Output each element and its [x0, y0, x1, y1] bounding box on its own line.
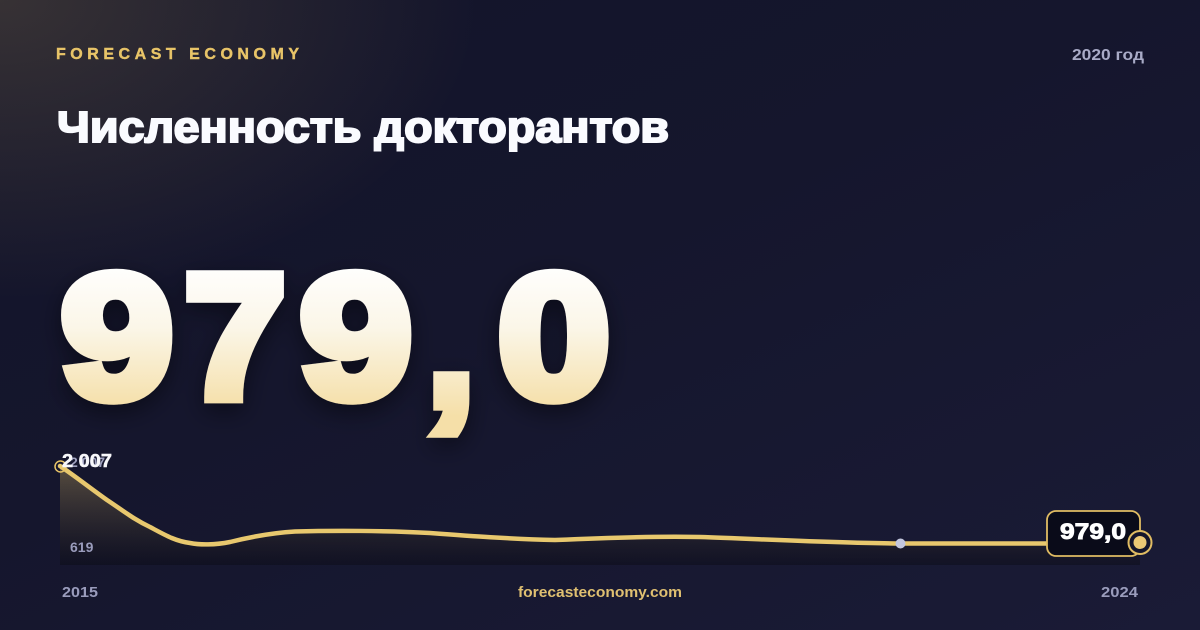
max value: 2 007 [62, 451, 112, 471]
2020 point marker [896, 538, 906, 548]
chart line [60, 466, 1140, 544]
big value: 9 [61, 238, 173, 434]
end marker [1128, 531, 1152, 554]
end year: 2024 [1101, 584, 1139, 601]
big value: 7 [185, 238, 285, 434]
value badge: 979,0 [1060, 519, 1126, 544]
brand label: FORECAST ECONOMY [56, 46, 299, 63]
title: Численность докторантов [57, 103, 669, 152]
min value: 619 [70, 539, 94, 555]
chart area fill [60, 466, 1140, 565]
max label, muted: 2 007 [70, 454, 105, 470]
value badge [1047, 511, 1140, 556]
max marker [55, 461, 66, 472]
big value: , [428, 246, 474, 442]
source url: forecasteconomy.com [518, 584, 682, 601]
area chart [60, 466, 1140, 565]
year label: 2020 год [1072, 47, 1144, 64]
big value: 0 [498, 238, 610, 434]
big value: 9 [300, 238, 412, 434]
chart area shade [60, 466, 1140, 565]
start year: 2015 [62, 584, 98, 601]
big value [61, 238, 610, 442]
